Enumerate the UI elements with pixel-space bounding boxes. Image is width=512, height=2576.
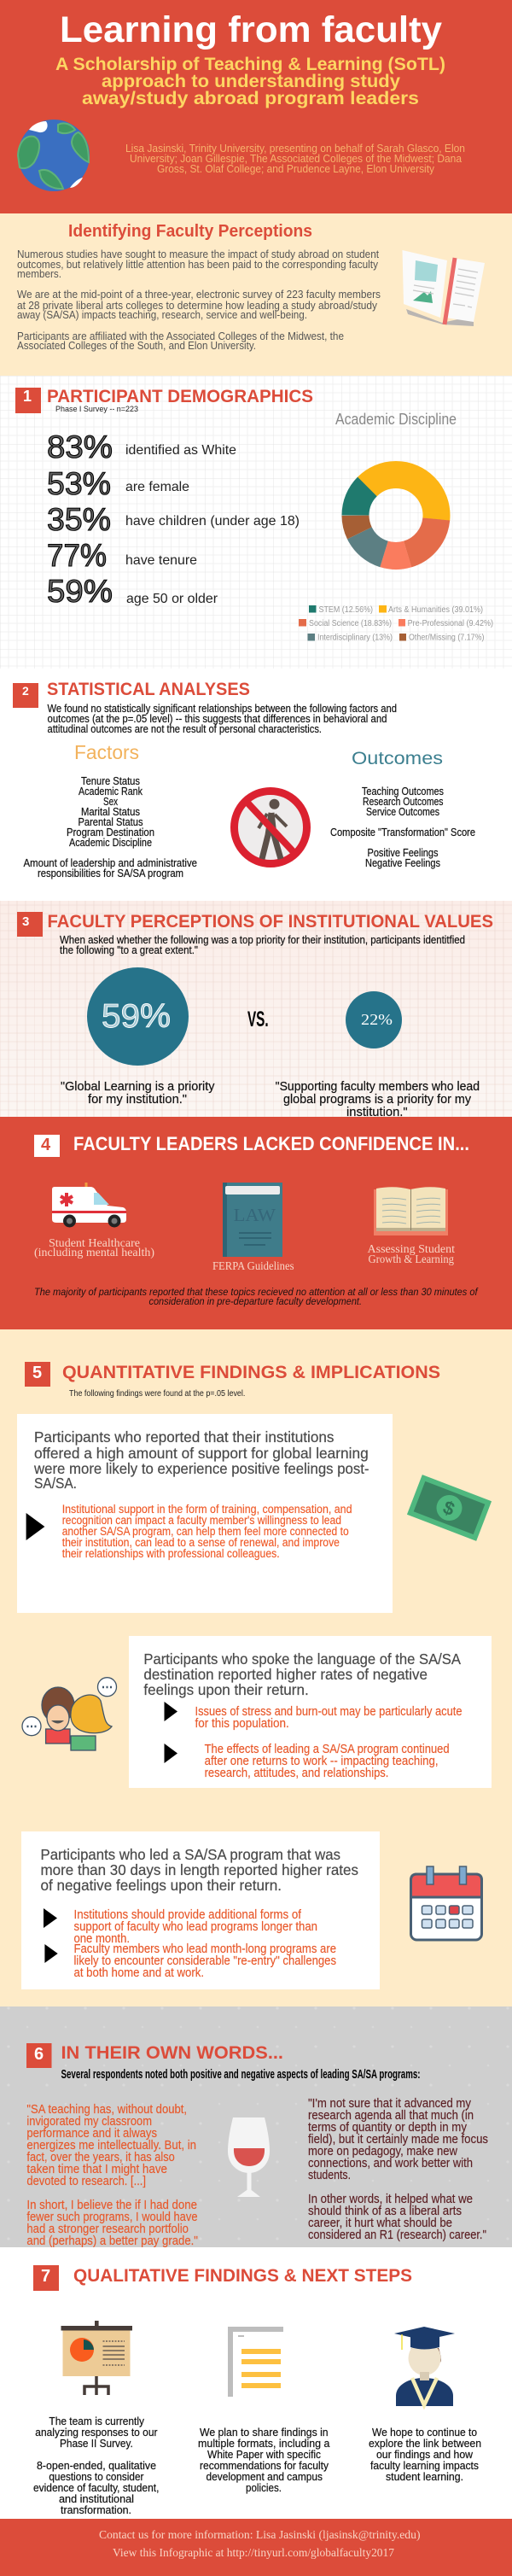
label: healthcare: Student Healthcare <box>49 1237 140 1250</box>
factors list <box>24 774 197 879</box>
title: Learning from faculty <box>60 9 442 50</box>
implication two: The effects of leading a SA/SA program continued <box>205 1743 450 1756</box>
arrow <box>164 1744 177 1763</box>
quote: right: more on pedagogy, make new <box>308 2145 457 2158</box>
number badge 3 <box>17 912 43 937</box>
stat: age: 59% <box>47 574 113 609</box>
label: healthcare <box>34 1237 154 1259</box>
authors <box>125 142 465 175</box>
summary text: attitudinal outcomes are not the result of personal characteristics. <box>48 722 322 735</box>
quote: right: research agenda all that much (in <box>308 2109 474 2123</box>
intro text: Associated Colleges of the South, and Elon University. <box>17 339 256 352</box>
icon: no walking sign <box>234 791 307 864</box>
quote: supporting faculty <box>276 1079 480 1119</box>
panel: faculty perceptions of institutional values <box>0 901 512 1119</box>
card implication: Institutional support in the form of training, compensation, and <box>62 1503 352 1516</box>
subtitle: A Scholarship of Teaching & Learning (SoTL) <box>55 54 445 74</box>
implication one: one month. <box>73 1932 130 1946</box>
implication one <box>73 1908 317 1946</box>
implication two: after one returns to work -- impacting teaching, <box>205 1755 439 1768</box>
text: current analysis: analyzing responses to our <box>35 2426 158 2439</box>
authors: University; Joan Gillespie, The Associated Colleges of the Midwest; Dana <box>130 152 463 165</box>
note text: consideration in pre-departure faculty development. <box>148 1295 362 1307</box>
quote: left: had a stronger research portfolio <box>26 2223 189 2236</box>
implication two <box>205 1743 450 1780</box>
stat circle: 22% <box>346 991 402 1049</box>
text: sharing plans: We plan to share findings in <box>200 2426 329 2439</box>
number badge 1 <box>15 388 41 413</box>
stat: age <box>47 574 218 609</box>
subtitle: approach to understanding study <box>102 71 400 91</box>
number badge 6 <box>26 2043 51 2068</box>
intro text: away (SA/SA) impacts teaching, research, service and well-being. <box>17 308 307 321</box>
stat: female: 53% <box>47 466 111 501</box>
card heading: destination reported higher rates of negative <box>143 1666 428 1683</box>
stat: white <box>47 429 236 464</box>
label: assessing: Growth & Learning <box>369 1253 454 1266</box>
panel: in their own words <box>0 2006 512 2248</box>
factors list: Amount of leadership and administrative <box>24 856 197 869</box>
card heading: SA/SA. <box>34 1475 77 1492</box>
outcomes list: Composite "Transformation" Score <box>330 826 475 838</box>
icon: law book <box>223 1183 282 1257</box>
heading: FACULTY LEADERS LACKED CONFIDENCE IN... <box>73 1133 469 1154</box>
stat: tenure: 77% <box>47 538 107 573</box>
stat: children <box>47 502 300 537</box>
card heading: Participants who led a SA/SA program that was <box>41 1846 340 1863</box>
quote: global learning: "Global Learning is a priority <box>61 1079 215 1094</box>
quote: supporting faculty: "Supporting faculty members who lead <box>276 1079 480 1094</box>
factors list: Parental Status <box>79 815 143 828</box>
panel: qualitative findings and next steps <box>0 2247 512 2519</box>
card implication: their institution, can lead to a sense of renewal, and improve <box>62 1536 340 1549</box>
quote: left: devoted to research. [...] <box>26 2175 146 2188</box>
panel: faculty leaders lacked confidence <box>0 1117 512 1329</box>
text: future exploration: student learning. <box>386 2470 463 2483</box>
text: future exploration: faculty learning impacts <box>370 2459 479 2472</box>
summary text: outcomes (at the p=.05 level) -- this suggests that differences in behavioral and <box>48 712 387 725</box>
survey note: Phase I Survey -- n=223 <box>55 405 138 414</box>
text: current analysis: 8-open-ended, qualitative <box>37 2459 156 2472</box>
icon: people talking <box>22 1678 116 1750</box>
quote: left: fewer such programs, I would have <box>26 2211 198 2224</box>
number badge 7 <box>33 2265 59 2291</box>
quote: left: In short, I believe the if I had done <box>26 2199 197 2212</box>
question text <box>60 933 465 956</box>
quote: left: invigorated my classroom <box>26 2115 152 2129</box>
authors: Gross, St. Olaf College; and Prudence Layne, Elon University <box>157 162 434 175</box>
text: future exploration: We hope to continue to <box>372 2426 477 2439</box>
text: sharing plans: policies. <box>246 2481 282 2494</box>
icon: open book <box>403 250 485 326</box>
implication one: support of faculty who lead programs longer than <box>73 1920 317 1934</box>
implication two: likely to encounter considerable "re-entry" challenges <box>73 1954 336 1968</box>
quote: left: fact, over the years, it has also <box>26 2151 175 2164</box>
stat circle: 22%: 22% <box>361 1011 393 1028</box>
number badge 5: 5 <box>32 1364 42 1382</box>
number badge 4 <box>34 1135 60 1157</box>
heading: FACULTY PERCEPTIONS OF INSTITUTIONAL VALUES <box>48 912 493 932</box>
factors list: Marital Status <box>81 805 140 818</box>
card implication <box>62 1503 352 1560</box>
intro text: Numerous studies have sought to measure the impact of study abroad on student <box>17 248 379 260</box>
factors list: responsibilities for SA/SA program <box>38 867 183 879</box>
text: current analysis: evidence of faculty, student, <box>33 2481 159 2494</box>
outcomes list: Positive Feelings <box>367 846 439 859</box>
card heading: more than 30 days in length reported higher rates <box>41 1861 358 1878</box>
factors list: Academic Discipline <box>69 836 152 849</box>
quote: right: considered an R1 (research) career." <box>308 2228 486 2242</box>
number badge 5 <box>25 1362 50 1387</box>
quote: right: should think of as a liberal arts <box>308 2205 462 2218</box>
implication one: Institutions should provide additional forms of <box>73 1908 302 1922</box>
text: future exploration <box>369 2426 481 2483</box>
card heading: Participants who reported that their institutions <box>34 1428 335 1446</box>
quote: left: taken time that I might have <box>26 2163 167 2176</box>
chart title: Academic Discipline <box>335 411 457 428</box>
card implication: their relationships with professional colleagues. <box>62 1547 280 1560</box>
heading: QUALITATIVE FINDINGS & NEXT STEPS <box>73 2266 412 2286</box>
number badge 6: 6 <box>34 2045 44 2064</box>
panel: header <box>0 0 512 213</box>
heading: IN THEIR OWN WORDS... <box>61 2043 283 2063</box>
factors list: Tenure Status <box>81 774 140 787</box>
quote: global learning: for my institution." <box>88 1092 187 1107</box>
stat circle: 59%: 59% <box>102 998 171 1035</box>
label: assessing <box>367 1243 455 1266</box>
card: institutional support <box>17 1414 393 1613</box>
number badge 7: 7 <box>41 2267 50 2286</box>
stat: children: have children (under age 18) <box>125 514 300 529</box>
heading: Identifying Faculty Perceptions <box>68 221 312 241</box>
link line: View this Infographic at http://tinyurl.com/globalfaculty2017 <box>113 2547 394 2560</box>
stat: age: age 50 or older <box>126 592 218 606</box>
factors list: Sex <box>103 795 118 808</box>
quote: left: and (perhaps) a better pay grade." <box>26 2234 198 2248</box>
quote: right: "I'm not sure that it advanced my <box>308 2097 472 2111</box>
number badge 2 <box>13 683 38 708</box>
quote: global learning <box>61 1079 215 1107</box>
label: FERPA: FERPA Guidelines <box>212 1260 294 1273</box>
label: healthcare: (including mental health) <box>34 1247 154 1259</box>
implication two: research, attitudes, and relationships. <box>205 1767 388 1780</box>
implication two: Faculty members who lead month-long programs are <box>73 1942 336 1956</box>
subtitle: away/study abroad program leaders <box>82 88 419 108</box>
text: current analysis <box>33 2415 159 2516</box>
intro text <box>17 248 381 352</box>
note text <box>34 1286 479 1307</box>
quote: right: career, it hurt what should be <box>308 2217 452 2230</box>
quote: right: terms of quantity or depth in my <box>308 2121 468 2135</box>
heading: QUANTITATIVE FINDINGS & IMPLICATIONS <box>62 1363 440 1382</box>
quote: left <box>26 2103 198 2248</box>
text: current analysis: The team is currently <box>49 2415 144 2427</box>
text: sharing plans <box>198 2426 330 2494</box>
number badge 1: 1 <box>23 388 32 405</box>
quote: left: performance and it always <box>26 2127 157 2141</box>
implication one: Issues of stress and burn-out may be particularly acute <box>195 1705 463 1719</box>
heading: PARTICIPANT DEMOGRAPHICS <box>47 387 313 406</box>
question text: When asked whether the following was a top priority for their institution, participants identitfied <box>60 933 465 946</box>
card heading: of negative feelings upon their return. <box>41 1877 282 1894</box>
outcomes heading: Outcomes <box>352 749 443 768</box>
quote: supporting faculty: institution." <box>346 1105 408 1119</box>
panel: footer <box>0 2519 512 2576</box>
contact line: Contact us for more information: Lisa Jasinski (ljasinsk@trinity.edu) <box>99 2529 421 2542</box>
stat circle: 59% <box>87 967 189 1066</box>
text: current analysis: transformation. <box>61 2503 131 2516</box>
donut chart <box>339 458 453 573</box>
panel: statistical analyses <box>0 669 512 901</box>
stat: female: are female <box>125 480 189 494</box>
icon: open book <box>374 1187 448 1235</box>
legend: STEM (12.56%) <box>319 605 373 615</box>
implication one: for this population. <box>195 1717 289 1731</box>
card heading <box>143 1650 461 1698</box>
icon: money <box>407 1475 492 1541</box>
number badge 2: 2 <box>22 684 29 698</box>
summary text <box>48 702 397 735</box>
number badge 3: 3 <box>22 914 29 929</box>
text: sharing plans: recommendations for faculty <box>200 2459 329 2472</box>
number badge 4: 4 <box>41 1136 51 1154</box>
text: sharing plans: development and campus <box>207 2470 323 2483</box>
versus label: VS. <box>247 1008 269 1031</box>
panel: identifying faculty perceptions <box>0 213 512 376</box>
icon: money: $ <box>440 1496 457 1520</box>
factors heading: Factors <box>74 741 139 763</box>
implication one <box>195 1705 463 1731</box>
text: sharing plans: White Paper with specific <box>207 2448 321 2461</box>
quote: supporting faculty: global programs is a priority for my <box>283 1092 471 1107</box>
icon: graduate <box>394 2327 455 2406</box>
factors list: Program Destination <box>67 826 154 838</box>
icon: wine glass <box>228 2117 270 2197</box>
icon: globe <box>18 120 90 191</box>
subtitle <box>55 54 445 108</box>
outcomes list: Research Outcomes <box>363 795 444 808</box>
intro text: We are at the mid-point of a three-year, electronic survey of 223 faculty members <box>17 288 381 301</box>
stat: white: identified as White <box>125 443 236 458</box>
arrow <box>164 1702 177 1721</box>
text: future exploration: our findings and how <box>376 2448 474 2461</box>
quote: right: students. <box>308 2169 351 2182</box>
legend: Arts & Humanities (39.01%) <box>388 605 483 615</box>
outcomes list: Teaching Outcomes <box>362 785 444 797</box>
authors: Lisa Jasinski, Trinity University, presenting on behalf of Sarah Glasco, Elon <box>125 142 465 155</box>
stat: tenure <box>47 538 197 573</box>
card heading: feelings upon their return. <box>143 1681 309 1698</box>
panel: participant demographics <box>0 376 512 669</box>
icon: ambulance <box>52 1183 126 1228</box>
heading: STATISTICAL ANALYSES <box>47 680 250 699</box>
icon: law book: LAW <box>234 1205 276 1225</box>
outcomes list <box>330 785 475 869</box>
icon: document <box>228 2327 283 2397</box>
legend: Interdisciplinary (13%) <box>317 634 393 642</box>
card heading <box>33 1428 369 1492</box>
card: program length <box>21 1831 380 1989</box>
card heading: Participants who spoke the language of the SA/SA <box>143 1650 461 1668</box>
text: current analysis: questions to consider <box>49 2470 144 2483</box>
text: current analysis: Phase II Survey. <box>60 2437 133 2450</box>
quote: right: In other words, it helped what we <box>308 2193 473 2206</box>
text: current analysis: and institutional <box>59 2492 134 2505</box>
outcomes list: Service Outcomes <box>366 805 439 818</box>
intro text: at 28 private liberal arts colleges to determine how leading a study abroad/study <box>17 299 378 312</box>
legend <box>299 605 493 642</box>
significance note: The following findings were found at the p=.05 level. <box>69 1389 245 1399</box>
quote: right <box>308 2097 488 2242</box>
implication two <box>73 1942 336 1980</box>
quote: left: energizes me intellectually. But, in <box>26 2139 196 2153</box>
card implication: recognition can impact a faculty member's willingness to lead <box>62 1514 341 1527</box>
arrow <box>26 1513 44 1540</box>
intro text: Participants are affiliated with the Associated Colleges of the Midwest, the <box>17 330 344 342</box>
legend: Other/Missing (7.17%) <box>409 634 485 642</box>
card: language <box>129 1636 492 1788</box>
stat: children: 35% <box>47 502 111 537</box>
icon: presentation board <box>61 2321 132 2395</box>
card heading <box>41 1846 358 1894</box>
outcomes list: Negative Feelings <box>365 856 440 869</box>
quote: right: connections, and work better with <box>308 2157 473 2170</box>
icon: calendar <box>411 1866 481 1940</box>
stat: female <box>47 466 189 501</box>
note text: The majority of participants reported that these topics recieved no attention at all or less than 30 minutes of <box>34 1286 479 1298</box>
legend: Social Science (18.83%) <box>309 619 392 628</box>
quote: left: "SA teaching has, without doubt, <box>26 2103 187 2117</box>
text: sharing plans: multiple formats, including a <box>198 2437 330 2450</box>
summary text: We found no statistically significant relationships between the following factors and <box>48 702 397 715</box>
card heading: were more likely to experience positive feelings post- <box>33 1460 369 1477</box>
label: assessing: Assessing Student <box>367 1243 455 1256</box>
panel: quantitative findings <box>0 1329 512 2006</box>
legend: Pre-Professional (9.42%) <box>408 619 493 628</box>
stat: white: 83% <box>47 429 113 464</box>
stat: tenure: have tenure <box>125 553 197 568</box>
implication two: at both home and at work. <box>73 1966 204 1980</box>
factors list: Academic Rank <box>79 785 143 797</box>
intro text: outcomes, but relatively little attention has been paid to the corresponding faculty <box>17 258 379 271</box>
quote: right: field), but it certainly made me focus <box>308 2133 488 2147</box>
intro text: members. <box>17 267 61 280</box>
card heading: offered a high amount of support for global learning <box>34 1445 369 1462</box>
question text: the following "to a great extent." <box>60 943 198 956</box>
card implication: another SA/SA program, can help them feel more connected to <box>62 1525 349 1538</box>
arrow <box>44 1944 58 1963</box>
arrow <box>44 1908 57 1928</box>
text: future exploration: explore the link between <box>369 2437 481 2450</box>
